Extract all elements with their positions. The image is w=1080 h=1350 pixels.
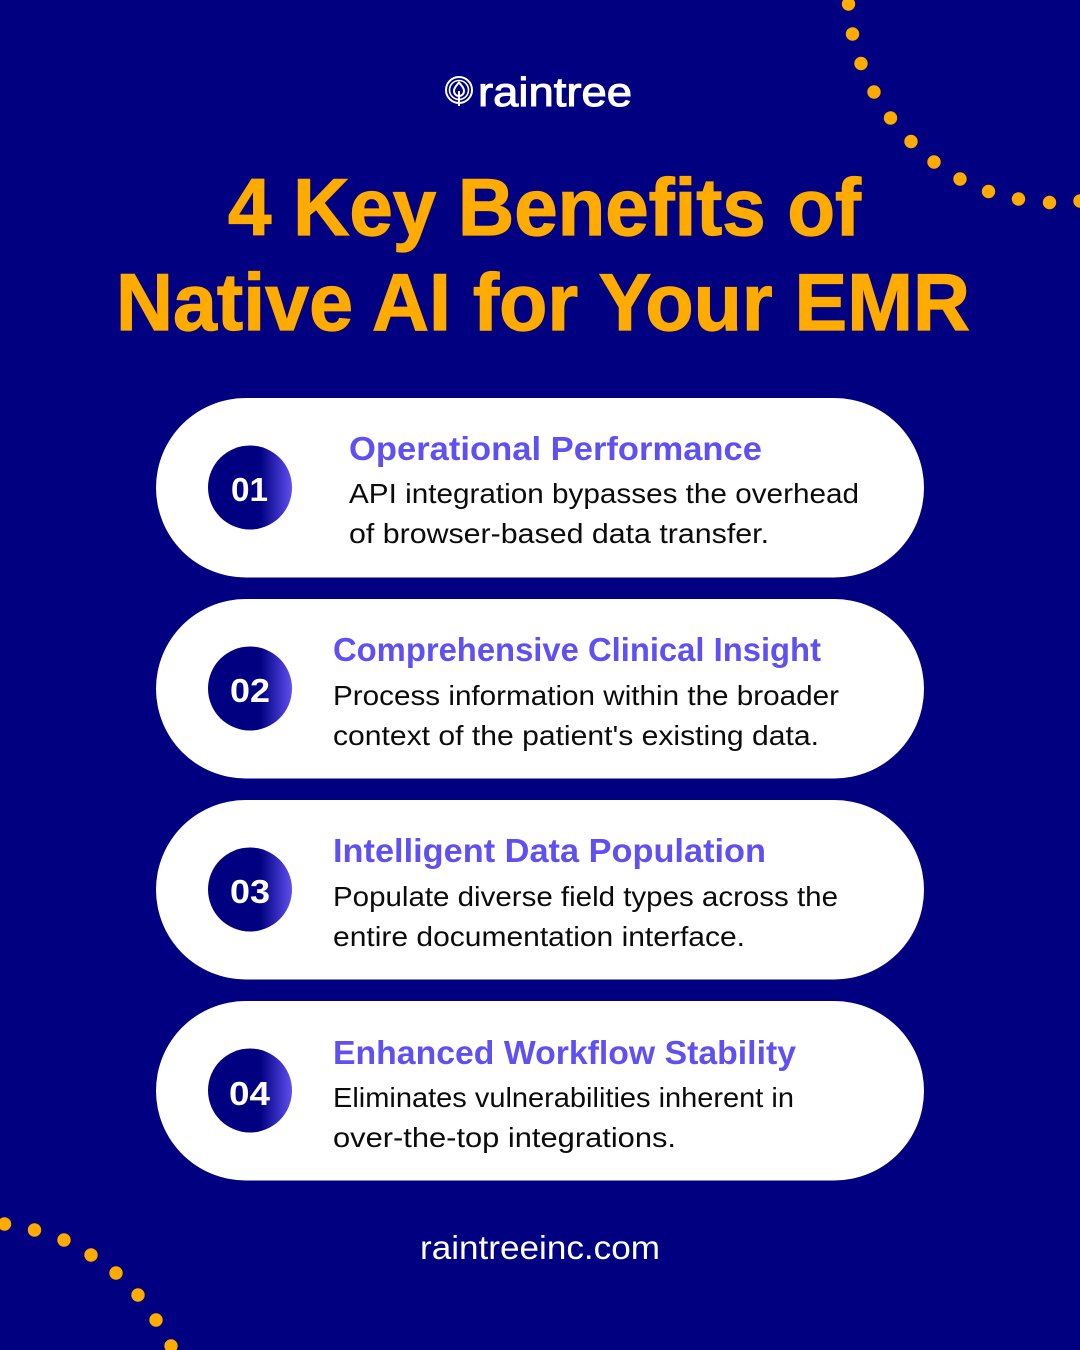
body text: Populate diverse field types across the [333, 881, 838, 912]
body text: over-the-top integrations. [333, 1122, 676, 1153]
title [116, 163, 970, 348]
body text [333, 680, 839, 751]
panel: benefit 02 [156, 599, 924, 778]
body text: entire documentation interface. [333, 921, 745, 952]
decorative dots: bottom left [0, 1217, 178, 1350]
heading: Enhanced Workflow Stability: Enhanced Workflow Stability [333, 1034, 797, 1071]
number badge 01 [208, 446, 292, 530]
panel: benefit 03 [156, 800, 924, 980]
footer website: raintreeinc.com [420, 1229, 660, 1266]
heading: Intelligent Data Population: Intelligent Data Population [333, 832, 766, 869]
title: 4 Key Benefits of [228, 163, 862, 253]
body text: context of the patient's existing data. [333, 720, 819, 751]
panel: benefit 01 [156, 398, 924, 578]
panel: benefit 04 [156, 1001, 924, 1180]
number badge 04 [208, 1048, 292, 1132]
body text: API integration bypasses the overhead [349, 478, 859, 509]
logo [446, 69, 632, 115]
number badge 02 [208, 646, 292, 730]
title: Native AI for Your EMR [116, 258, 970, 348]
logo wordmark: raintree [478, 69, 632, 115]
number badge 01: 01 [231, 471, 268, 508]
body text: of browser-based data transfer. [349, 518, 769, 549]
number badge 02: 02 [230, 672, 270, 709]
body text: Process information within the broader [333, 680, 839, 711]
body text [333, 1082, 794, 1153]
body text [333, 881, 838, 952]
body text [349, 478, 859, 549]
body text: Eliminates vulnerabilities inherent in [333, 1082, 794, 1113]
number badge 04: 04 [229, 1075, 271, 1112]
number badge 03: 03 [230, 873, 270, 910]
heading: Comprehensive Clinical Insight: Comprehensive Clinical Insight [333, 631, 821, 668]
number badge 03 [208, 848, 292, 932]
decorative dots: top right [842, 0, 1080, 209]
heading: Operational Performance: Operational Performance [349, 430, 762, 467]
icon: raintree rings and drop [446, 77, 472, 106]
